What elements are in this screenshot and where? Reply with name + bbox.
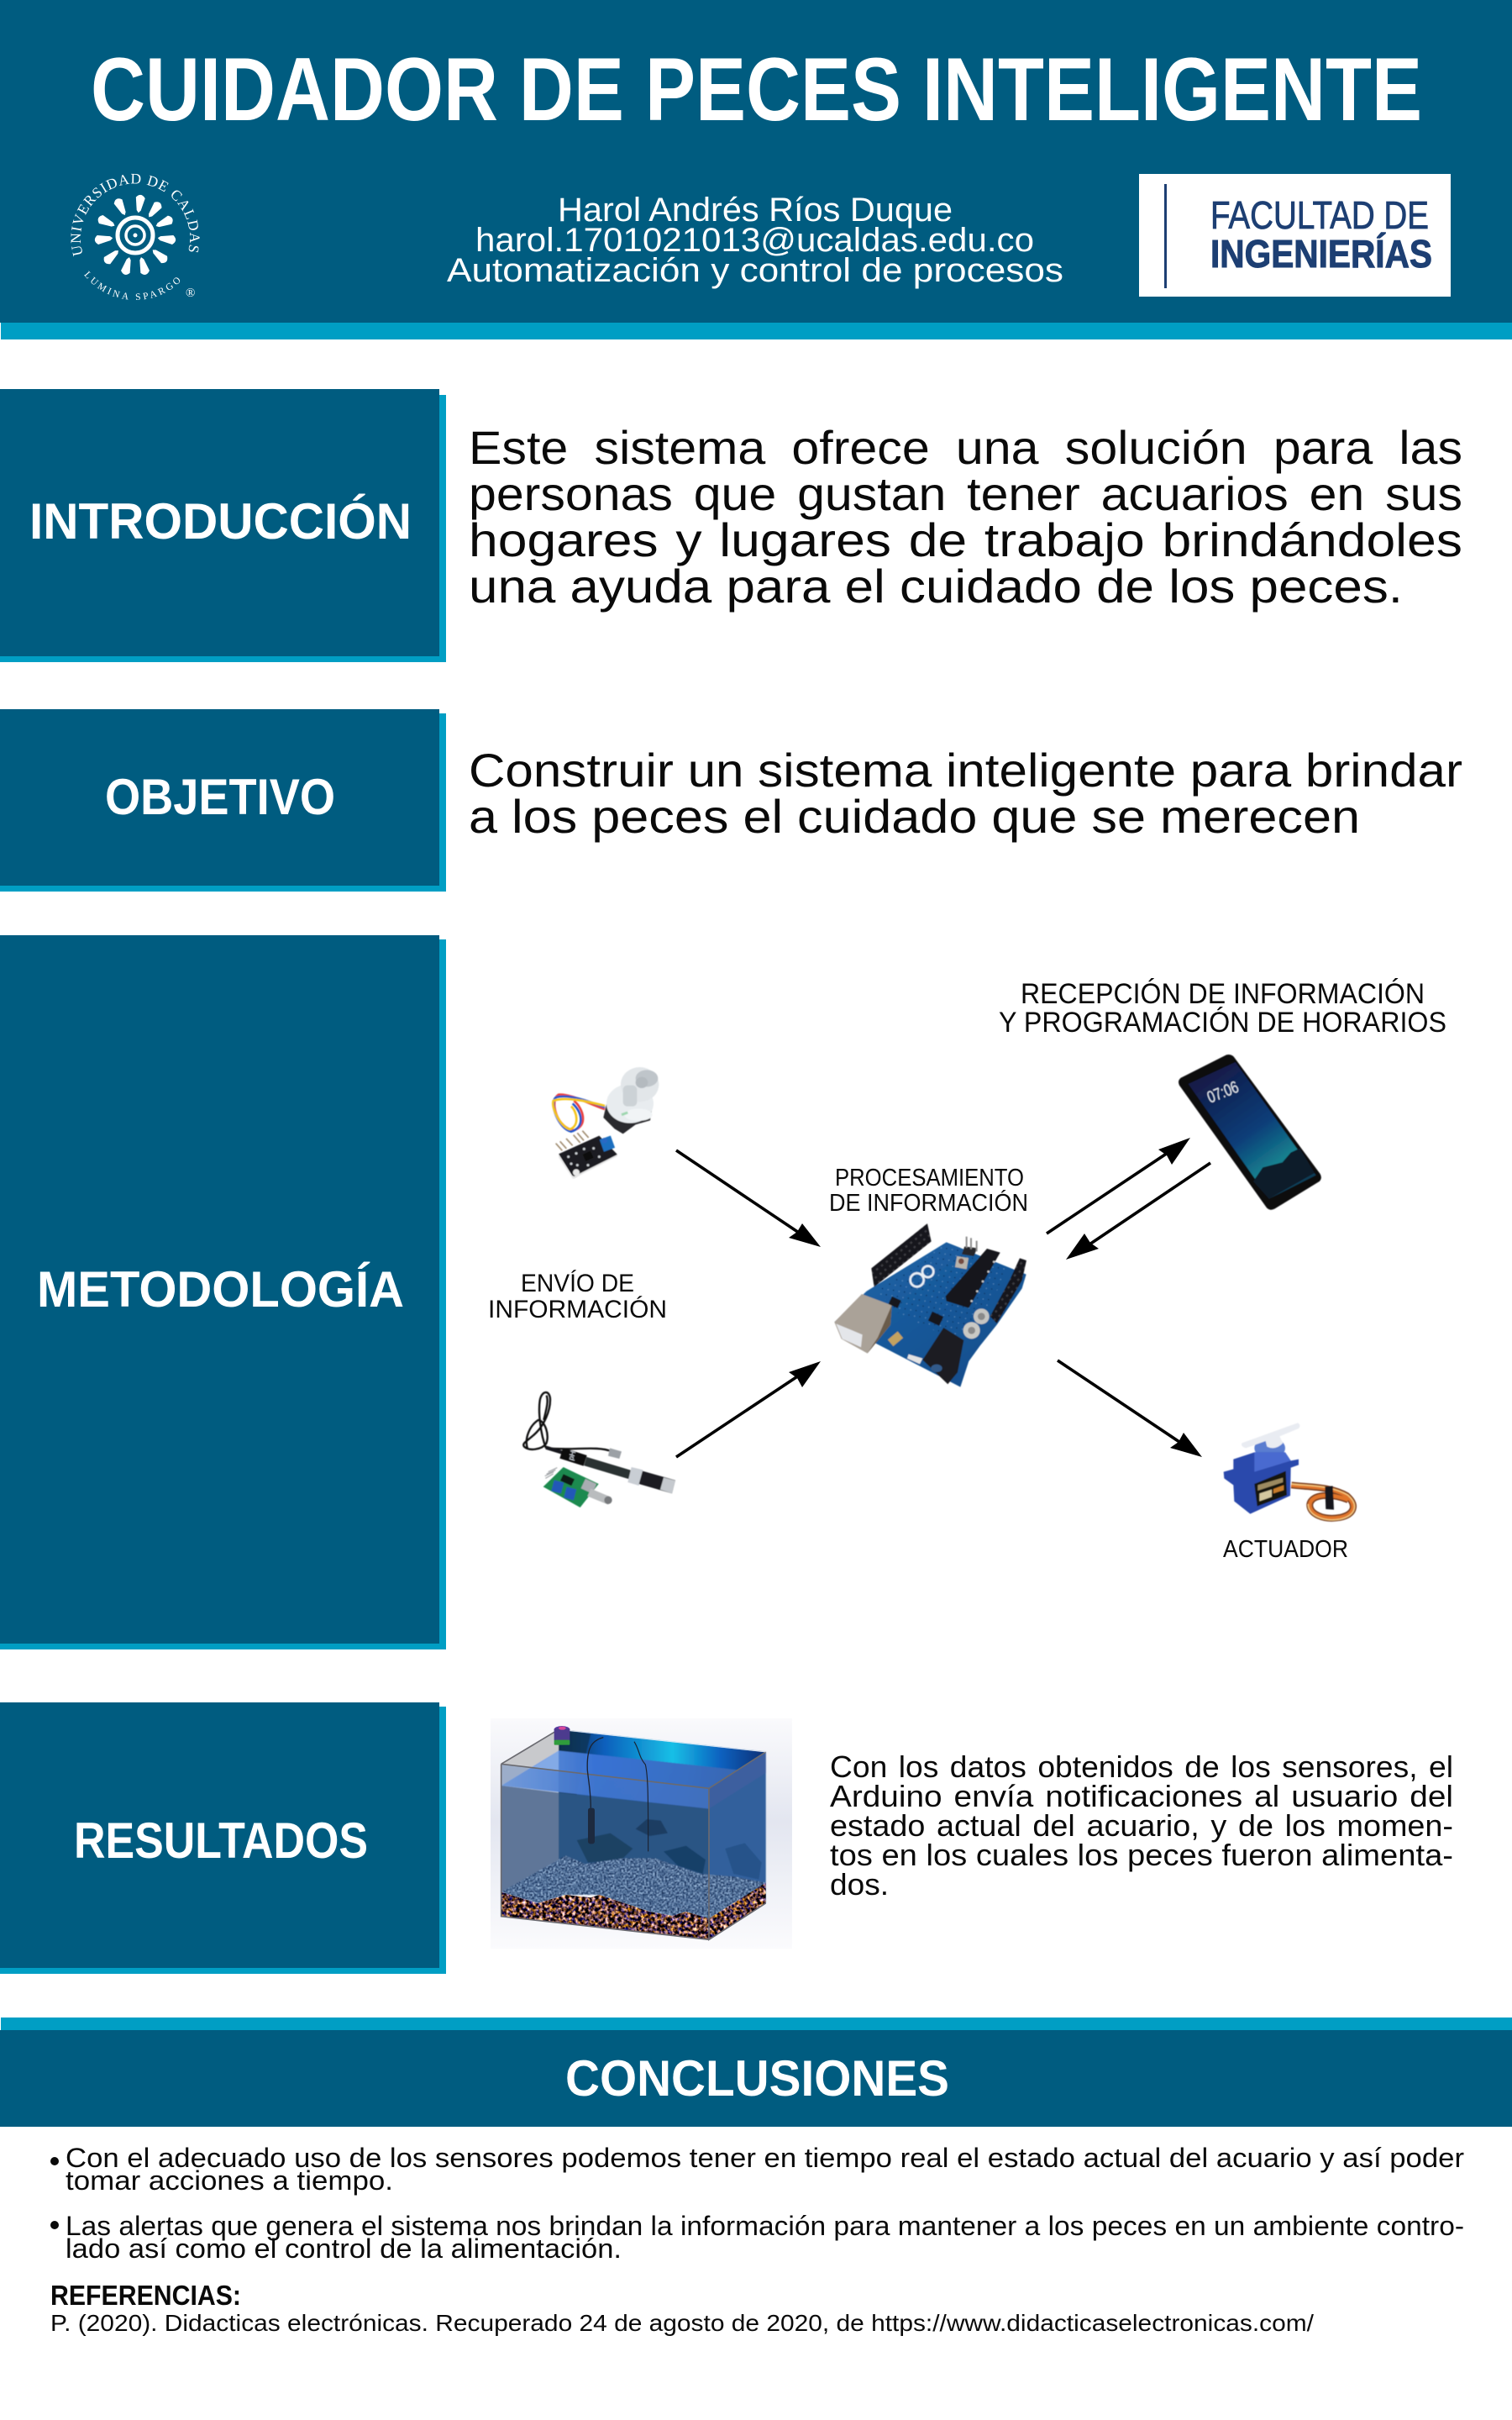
label: envío (488, 1270, 667, 1323)
label: recepción: Y PROGRAMACIÓN DE HORARIOS (999, 1007, 1446, 1039)
faculty logo: FACULTAD DE (1210, 193, 1429, 237)
bullet 2: Las alertas que genera el sistema nos brindan la información para mantener a los peces en un ambiente contro- (66, 2211, 1464, 2241)
author block: Harol Andrés Ríos Duque (558, 192, 953, 229)
author block: harol.1701021013@ucaldas.edu.co (475, 222, 1034, 259)
author block: Automatización y control de procesos (447, 252, 1063, 289)
label: envío: INFORMACIÓN (488, 1296, 667, 1323)
bullet 1 (50, 2143, 1464, 2196)
faculty logo (1139, 174, 1451, 297)
text: resultados (830, 1749, 1453, 1902)
label: procesamiento: PROCESAMIENTO (835, 1165, 1024, 1192)
icon: ph probe (523, 1392, 675, 1507)
arrow: phone to arduino (1066, 1163, 1210, 1260)
logo: Universidad de Caldas: ® (186, 287, 195, 300)
text: objetivo (469, 744, 1462, 843)
list: conclusiones (50, 2143, 1464, 2264)
icon: smartphone (1179, 1055, 1321, 1210)
label: procesamiento: DE INFORMACIÓN (829, 1189, 1028, 1217)
arrow: arduino to servo (1058, 1360, 1202, 1457)
references (50, 2280, 1314, 2336)
logo: Universidad de Caldas: LUMINA SPARGO (84, 271, 180, 300)
panel: objetivo (0, 709, 446, 892)
icon: smartphone: 07:06 (1205, 1078, 1242, 1107)
heading: introducción: INTRODUCCIÓN (29, 493, 412, 550)
bullet 1: tomar acciones a tiempo. (66, 2165, 393, 2196)
logo: Universidad de Caldas (71, 173, 200, 300)
text: resultados: Arduino envía notificaciones al usuario del (830, 1779, 1453, 1813)
text: resultados: Con los datos obtenidos de los sensores, el (830, 1749, 1453, 1784)
text: objetivo: Construir un sistema inteligente para brindar (469, 744, 1462, 797)
panel: metodología (0, 935, 446, 1649)
references: REFERENCIAS: (50, 2280, 241, 2311)
panel: introducción (0, 389, 446, 662)
icon: arduino board (834, 1223, 1026, 1387)
text: resultados: tos en los cuales los peces fueron alimenta- (830, 1838, 1453, 1872)
bullet 2 (50, 2211, 1464, 2264)
references: P. (2020). Didacticas electrónicas. Recuperado 24 de agosto de 2020, de https://www.didacticaselectronicas.com/ (50, 2310, 1314, 2336)
panel: resultados (0, 1702, 446, 1974)
text: introducción (469, 421, 1462, 613)
bullet 2: lado así como el control de la alimentación. (66, 2233, 622, 2264)
header band (0, 0, 1512, 339)
heading: metodología: METODOLOGÍA (37, 1261, 404, 1318)
bullet 1: Con el adecuado uso de los sensores podemos tener en tiempo real el estado actual del acuario y así poder (66, 2143, 1464, 2173)
heading: objetivo: OBJETIVO (105, 769, 335, 825)
author block (447, 192, 1063, 289)
logo: Universidad de Caldas: UNIVERSIDAD DE CALDAS (71, 173, 200, 257)
arrow: arduino to phone (1047, 1138, 1190, 1234)
text: introducción: personas que gustan tener acuarios en sus (469, 467, 1462, 520)
label: envío: ENVÍO DE (521, 1270, 634, 1297)
arrow: sensor 1 to arduino (676, 1150, 821, 1247)
text: resultados: estado actual del acuario, y de los momen- (830, 1808, 1453, 1843)
heading: conclusiones: CONCLUSIONES (565, 2050, 949, 2107)
arrow: sensor 2 to arduino (676, 1361, 821, 1457)
icon: turbidity sensor (553, 1067, 659, 1179)
icon: servo motor (1224, 1423, 1354, 1520)
diagram: metodología (488, 978, 1446, 1563)
text: resultados: dos. (830, 1867, 889, 1902)
label: procesamiento (829, 1165, 1028, 1217)
icon: ph probe: pH (566, 1449, 577, 1461)
image: aquarium render (491, 1718, 792, 1949)
text: introducción: hogares y lugares de trabajo brindándoles (469, 513, 1462, 566)
faculty logo: INGENIERÍAS (1210, 232, 1432, 276)
text: objetivo: a los peces el cuidado que se merecen (469, 790, 1360, 843)
label: recepción (999, 978, 1446, 1039)
label: actuador: ACTUADOR (1223, 1536, 1348, 1563)
text: introducción: Este sistema ofrece una solución para las (469, 421, 1462, 474)
panel: conclusiones (0, 2018, 1512, 2127)
label: recepción: RECEPCIÓN DE INFORMACIÓN (1021, 978, 1425, 1010)
text: introducción: una ayuda para el cuidado de los peces. (469, 560, 1403, 613)
heading: resultados: RESULTADOS (74, 1812, 368, 1869)
